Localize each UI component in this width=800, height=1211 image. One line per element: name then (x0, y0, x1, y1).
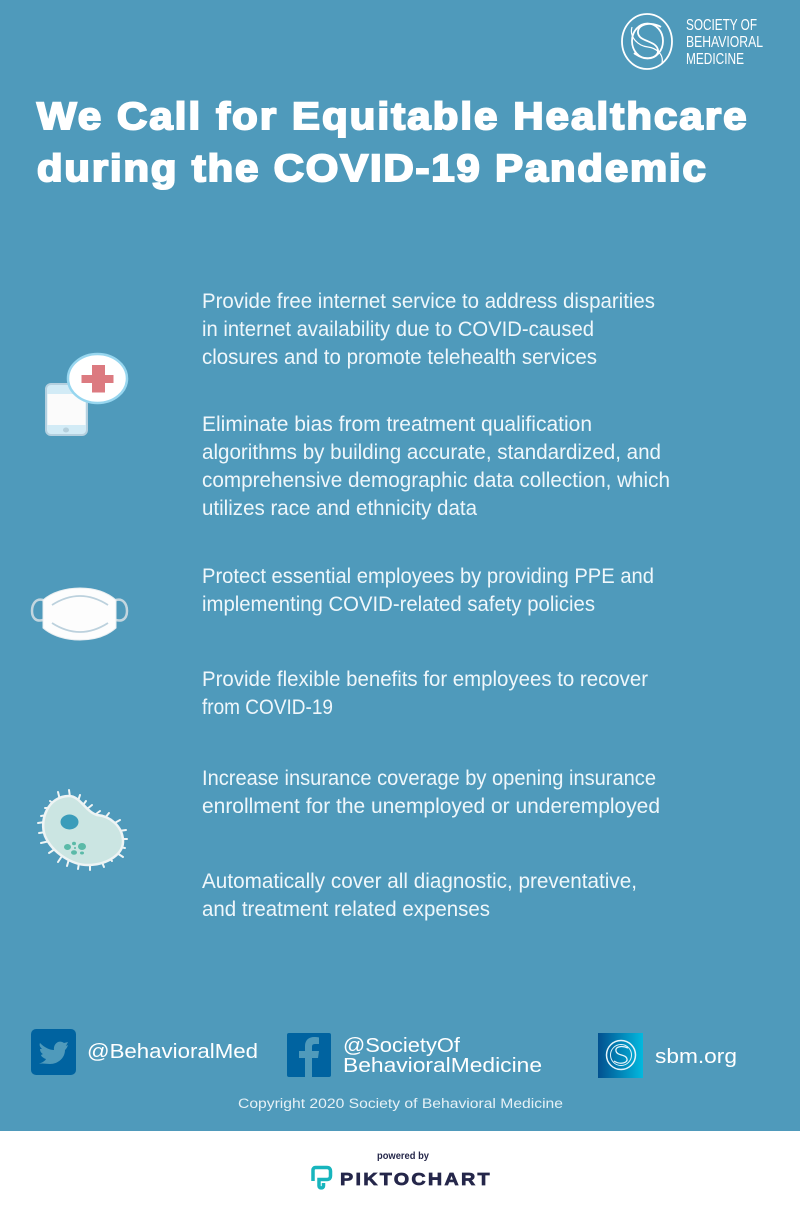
text block: internet service: in internet availability due to COVID-caused (202, 318, 594, 341)
piktochart logo: PIKTOCHART (340, 1170, 490, 1190)
title: We Call for Equitable Healthcare (37, 96, 747, 138)
website contact (598, 1033, 737, 1078)
text block: treatment algorithms: comprehensive demographic data collection, which (202, 469, 670, 492)
text block: automatic coverage: and treatment related expenses (202, 898, 490, 921)
text block: treatment algorithms: utilizes race and ethnicity data (202, 497, 477, 520)
icon: face mask (32, 588, 127, 640)
text block: essential employees: Protect essential employees by providing PPE and (202, 565, 654, 588)
icon: bacterium (38, 790, 127, 870)
logo: Society of Behavioral Medicine: SOCIETY OF (686, 17, 757, 34)
text block: flexible benefits (202, 668, 648, 719)
text block: automatic coverage (202, 870, 637, 921)
text block: treatment algorithms (202, 413, 670, 520)
icon: tablet with medical cross (46, 354, 127, 435)
powered by text: powered by (377, 1150, 429, 1162)
text block: automatic coverage: Automatically cover all diagnostic, preventative, (202, 870, 637, 893)
text block: treatment algorithms: Eliminate bias from treatment qualification (202, 413, 592, 436)
text block: insurance coverage: enrollment for the unemployed or underemployed (202, 795, 660, 818)
facebook contact (287, 1033, 542, 1077)
text block: essential employees (202, 565, 654, 616)
logo: Society of Behavioral Medicine: MEDICINE (686, 51, 744, 68)
twitter contact: @BehavioralMed (87, 1040, 258, 1063)
text block: internet service: closures and to promote telehealth services (202, 346, 597, 369)
text block: internet service (202, 290, 655, 369)
copyright: Copyright 2020 Society of Behavioral Medicine (238, 1096, 563, 1111)
text block: flexible benefits: Provide flexible benefits for employees to recover (202, 668, 648, 691)
logo: Society of Behavioral Medicine (622, 14, 763, 69)
text block: insurance coverage (202, 767, 660, 818)
facebook contact: @SocietyOf (343, 1034, 460, 1057)
website contact: sbm.org (655, 1045, 737, 1068)
text block: internet service: Provide free internet service to address disparities (202, 290, 655, 313)
title: during the COVID-19 Pandemic (37, 148, 706, 190)
logo: Society of Behavioral Medicine: BEHAVIORAL (686, 34, 763, 51)
text block: flexible benefits: from COVID-19 (202, 696, 333, 719)
text block: essential employees: implementing COVID-related safety policies (202, 593, 595, 616)
text block: insurance coverage: Increase insurance coverage by opening insurance (202, 767, 656, 790)
text block: treatment algorithms: algorithms by building accurate, standardized, and (202, 441, 661, 464)
twitter contact (31, 1029, 258, 1075)
footer band (0, 1131, 800, 1211)
facebook contact: BehavioralMedicine (343, 1054, 542, 1077)
title (37, 96, 746, 190)
